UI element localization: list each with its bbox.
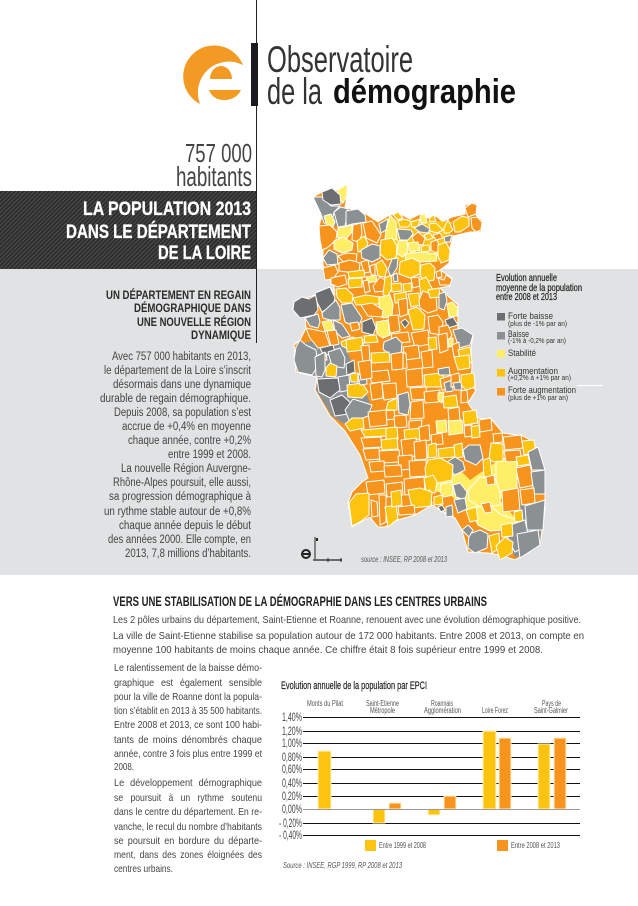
text block: left column: vanche, le recul du nombre d’habitants [114,821,262,833]
map legend: Stabilité [508,348,536,359]
key figure: 757 000 habitants: 757 000 [185,138,252,168]
text block: left column: ment, dans des zones éloignées des [114,849,262,861]
title: Observatoire de la démographie: démographie [333,73,516,111]
panel: grey map background [0,269,638,575]
text block: introduction paragraph: un rythme stable autour de +0,8% [104,506,251,518]
text block: left column: Entre 2008 et 2013, ce sont 100 habi- [114,719,262,731]
map legend: Forte baisse [508,311,553,322]
chart column labels: Roannais [431,699,453,708]
chart column labels: Saint-Galmier [534,706,568,715]
text block: left column: Le ralentissement de la baisse démo- [114,662,262,674]
title: Observatoire de la démographie: Observatoire [267,39,413,80]
chart y axis labels: 0,60% [282,764,302,776]
text block: left column: se poursuit à un rythme soutenu [114,792,262,804]
text block: left column: pour la ville de Roanne dont la popula- [114,691,262,703]
chart legend: Entre 2008 et 2013 [511,841,560,850]
key figure: 757 000 habitants [176,138,252,192]
chart y axis labels: 1,20% [282,726,302,738]
icon: orange e logo [183,43,258,106]
chart y axis labels: 0,80% [282,752,302,764]
text block: left column: année, contre 3 fois plus entre 1999 et [114,748,262,760]
text block: introduction paragraph: 2013, 7,8 millions d’habitants. [125,548,251,560]
map legend: (plus de -1% par an) [508,319,567,328]
text block: introduction paragraph: durable de regain démographique. [100,393,251,405]
panel: hatched title band [0,191,257,269]
text block: left column: se poursuit en bordure du départe- [114,835,262,847]
text block: introduction paragraph: des années 2000. Elle compte, en [108,534,251,546]
chart legend: Entre 1999 et 2008 [379,841,426,850]
text block: introduction paragraph: sa progression démographique à [109,491,252,503]
text block: left column: tion s’établit en 2013 à 35 500 habitants. [114,705,262,717]
chart column labels: Loire Forez [482,706,508,715]
text block: left column [114,662,262,875]
chart column labels: Agglomération [424,706,461,715]
chart y axis labels: 1,00% [282,738,302,750]
map legend: Evolution annuelle [496,272,557,284]
text block: introduction paragraph: accrue de +0,4% en moyenne [122,421,251,433]
chart column labels: Pays de [542,699,561,708]
key figure: 757 000 habitants: habitants [176,161,252,192]
text block: left column: tants de moins dénombrés chaque [114,734,262,746]
chart source: Source : INSEE, RGP 1999, RP 2008 et 2013 [283,861,402,870]
map legend: Augmentation [508,366,558,377]
text block: introduction paragraph: Depuis 2008, sa population s’est [114,407,252,419]
heading: La population 2013 dans le département de la Loire: DE LA LOIRE [158,243,251,264]
map legend: Forte augmentation [508,385,576,396]
chart y axis labels: - 0,20% [279,818,302,830]
chart y axis labels [279,712,302,842]
text block: introduction paragraph: Avec 757 000 habitants en 2013, [112,351,251,363]
text block: introduction paragraph: chaque année depuis le début [119,520,252,532]
chart bars [318,731,566,823]
chart grid lines [303,718,580,836]
text block: introduction paragraph: désormais dans une dynamique [113,379,251,391]
text block: left column: centres urbains. [114,863,173,875]
title: Observatoire de la démographie: de la [267,71,322,112]
chart column labels: Métropole [370,706,395,715]
bar chart: evolution annuelle par EPCI [279,680,580,851]
text block: introduction paragraph [100,351,252,560]
map legend: Baisse [508,329,529,340]
text block: left column: Le développement démographique [114,777,262,789]
chart column labels: Saint-Etienne [366,699,399,708]
text block: section introduction: La ville de Saint-Etienne stabilise sa population autour de 172 000 habitants. Entre 2008 et 2013, on compte en [113,630,584,642]
title: Observatoire de la démographie [267,39,516,112]
map legend: (plus de +1% par an) [508,393,568,402]
map legend [496,272,603,402]
chart column labels [307,699,568,715]
chart y axis labels: 1,40% [282,712,302,724]
text block: introduction paragraph: Rhône-Alpes poursuit, elle aussi, [113,477,251,489]
subheading: un département en regain: UNE NOUVELLE RÉGION [137,314,251,329]
heading: La population 2013 dans le département de la Loire: DANS LE DÉPARTEMENT [66,221,251,243]
text block: left column: 2008. [114,761,134,773]
text block: section introduction: moyenne 100 habitants de moins chaque année. Ce chiffre était 8 fois supérieur entre 1999 et 2008. [113,644,543,656]
text block: introduction paragraph: La nouvelle Région Auvergne- [121,463,251,475]
subheading: un département en regain [106,287,251,342]
text block: section introduction [113,614,584,656]
choropleth map of the Loire communes [293,184,545,560]
text block: introduction paragraph: le département de la Loire s’inscrit [104,365,252,377]
text block: left column: graphique est également sensible [114,677,262,689]
heading: La population 2013 dans le département de la Loire: LA POPULATION 2013 [83,199,251,220]
subheading: un département en regain: UN DÉPARTEMENT EN REGAIN [106,287,251,302]
subheading: un département en regain: DÉMOGRAPHIQUE DANS [134,300,251,315]
chart title: Evolution annuelle de la population par EPCI [281,680,427,692]
subheading: un département en regain: DYNAMIQUE [191,328,251,342]
text block: introduction paragraph: entre 1999 et 2008. [168,449,251,461]
heading: La population 2013 dans le département de la Loire [66,199,251,264]
map source: source : INSEE, RP 2008 et 2013 [361,555,447,564]
map legend: moyenne de la population [496,282,582,294]
text block: introduction paragraph: chaque année, contre +0,2% [128,435,251,447]
text block: left column: dans le centre du département. En re- [114,806,262,818]
chart y axis labels: 0,00% [282,804,302,816]
map legend: entre 2008 et 2013 [496,291,557,303]
map legend: (+0,2% à +1% par an) [508,373,571,382]
chart y axis labels: 0,20% [282,791,302,803]
map legend: (-1% à -0,2% par an) [508,336,566,345]
chart legend [365,840,560,851]
chart column labels: Monts du Pilat [307,699,344,708]
chart y axis labels: - 0,40% [279,830,302,842]
chart y axis labels: 0,40% [282,778,302,790]
map logo and scale [302,537,342,562]
